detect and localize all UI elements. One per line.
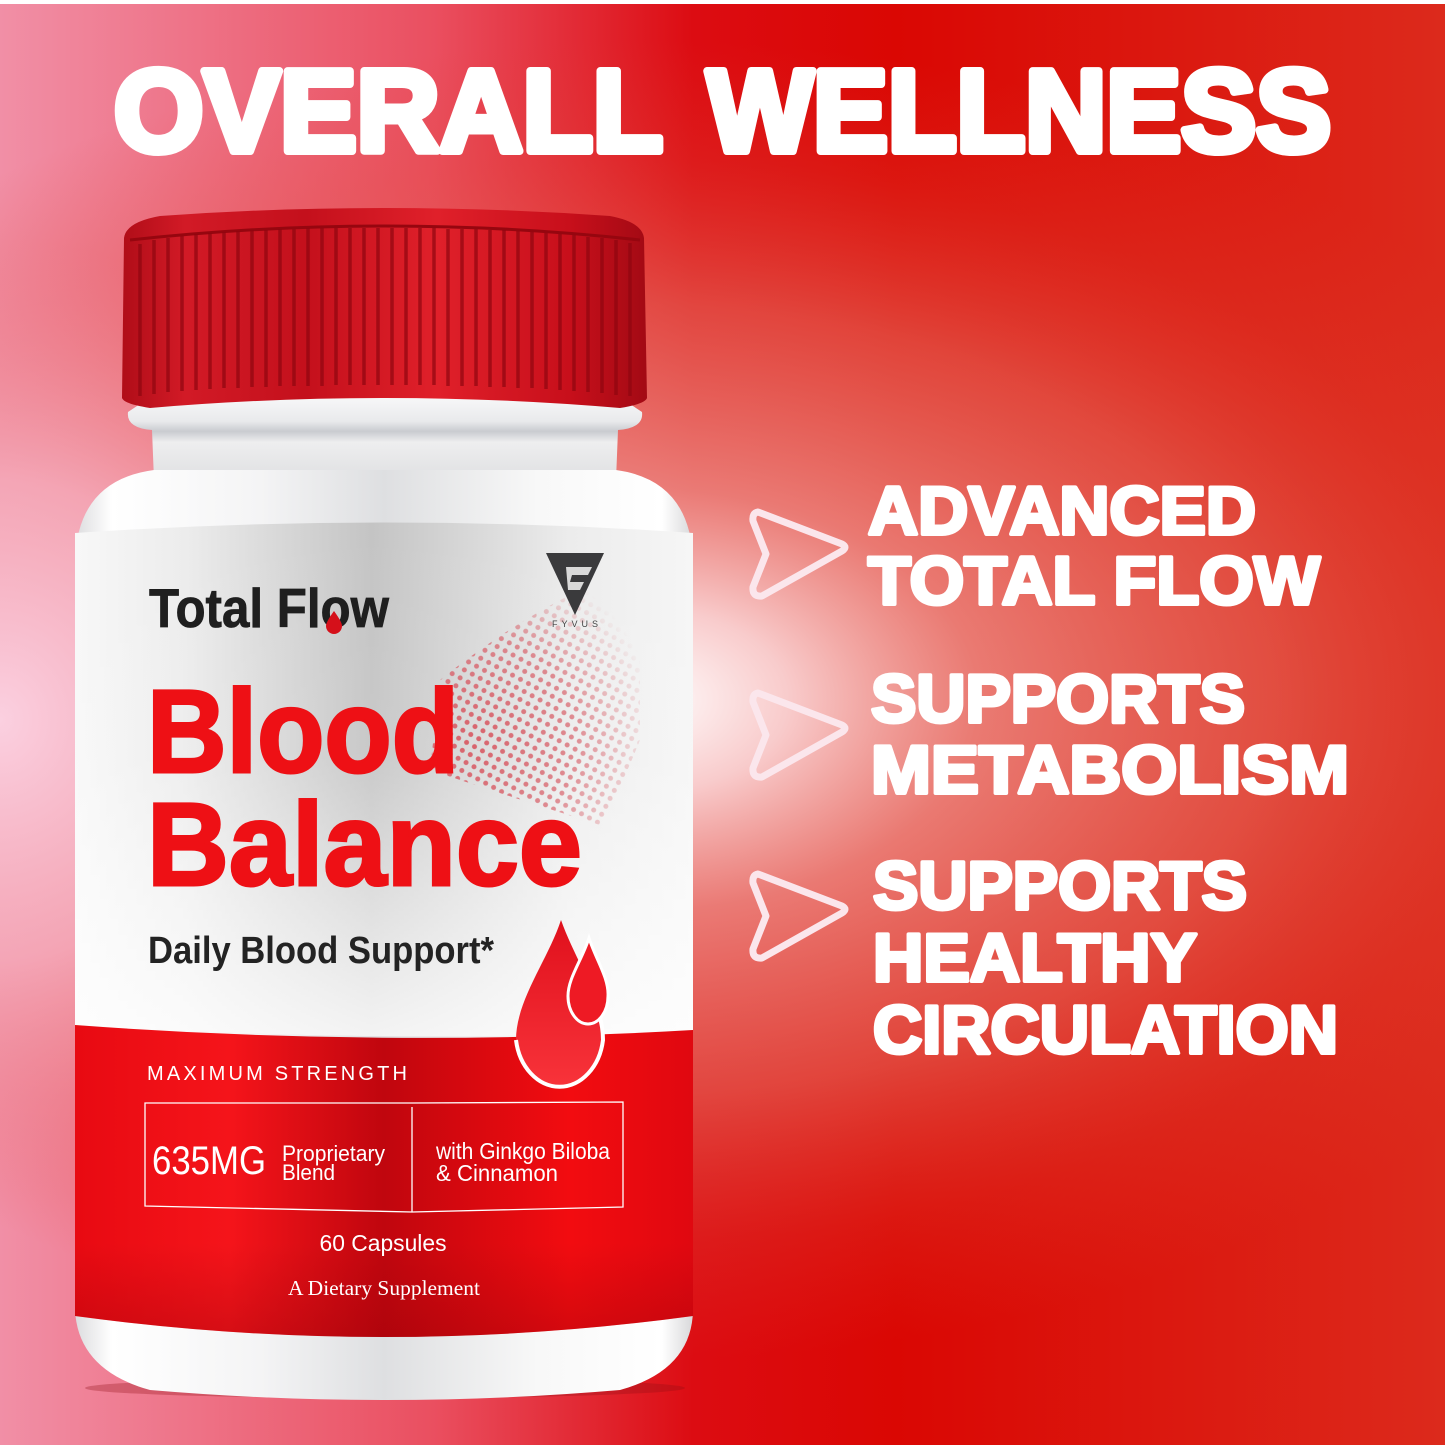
- product bottle: [75, 208, 693, 1400]
- tagline: Daily Blood Support*: [148, 930, 494, 972]
- cap ridges: [140, 228, 630, 396]
- benefit text 1: TOTAL FLOW: [868, 543, 1321, 619]
- benefit text 3: CIRCULATION: [873, 992, 1338, 1068]
- benefit text 1: ADVANCED: [868, 473, 1256, 549]
- benefit text 3: HEALTHY: [873, 920, 1197, 996]
- bottle body: [75, 470, 693, 1400]
- product name: Balance: [147, 779, 582, 911]
- brand name: Total Flow: [149, 577, 389, 639]
- benefit 1: [753, 473, 1321, 619]
- drops icon: [516, 920, 608, 1087]
- maximum strength: MAXIMUM STRENGTH: [147, 1063, 410, 1085]
- title: [114, 46, 1331, 176]
- title: OVERALL: [114, 46, 663, 176]
- benefit 3: [753, 848, 1338, 1068]
- benefit text 2: [871, 661, 1349, 808]
- title: WELLNESS: [707, 46, 1331, 176]
- benefit text 3: SUPPORTS: [873, 848, 1247, 924]
- info box: [145, 1102, 623, 1212]
- label white area: [75, 522, 693, 1036]
- info box: & Cinnamon: [436, 1160, 558, 1186]
- benefit text 2: METABOLISM: [871, 732, 1349, 808]
- arrow icon 1: [753, 512, 845, 596]
- supplement line: A Dietary Supplement: [288, 1276, 480, 1300]
- info box: 635MG: [152, 1139, 266, 1183]
- cap: [122, 208, 647, 408]
- brand drop: [326, 611, 342, 634]
- capsule count: 60 Capsules: [320, 1230, 446, 1256]
- info box: Blend: [282, 1160, 335, 1185]
- logo: Fyvus: FYVUS: [552, 619, 602, 629]
- logo: Fyvus: [546, 553, 604, 629]
- halftone dots: [432, 598, 640, 824]
- benefit text 2: SUPPORTS: [871, 661, 1245, 737]
- bottle shadow: [85, 1378, 685, 1398]
- info box: Proprietary: [282, 1141, 385, 1166]
- benefit 2: [753, 661, 1349, 808]
- product name: [147, 666, 582, 911]
- label red area: [75, 1025, 693, 1337]
- info box: with Ginkgo Biloba: [435, 1138, 610, 1164]
- benefit text 1: [868, 473, 1321, 619]
- product name: Blood: [147, 666, 459, 798]
- benefit text 3: [873, 848, 1338, 1068]
- bottle neck: [128, 396, 642, 480]
- arrow icon 3: [753, 874, 845, 958]
- arrow icon 2: [753, 693, 845, 777]
